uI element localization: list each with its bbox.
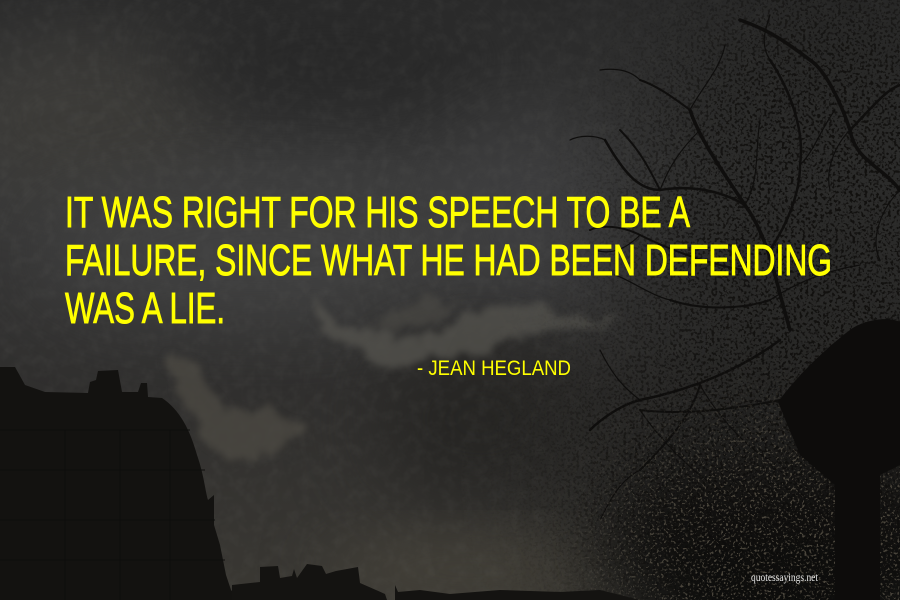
background: lit clouds <box>165 297 625 462</box>
quote text <box>65 188 832 333</box>
background: left building silhouette <box>0 367 240 600</box>
watermark: quotessayings.net <box>751 572 819 584</box>
background: bare tree branches <box>570 15 900 520</box>
attribution: - JEAN HEGLAND <box>417 357 571 380</box>
background: bright speckle behind lower tree <box>586 376 900 600</box>
background: street lamp silhouette <box>778 319 900 600</box>
quote text: WAS A LIE. <box>65 284 225 333</box>
background: dark tree mass <box>530 0 900 600</box>
background: distant rooftops <box>232 564 640 600</box>
